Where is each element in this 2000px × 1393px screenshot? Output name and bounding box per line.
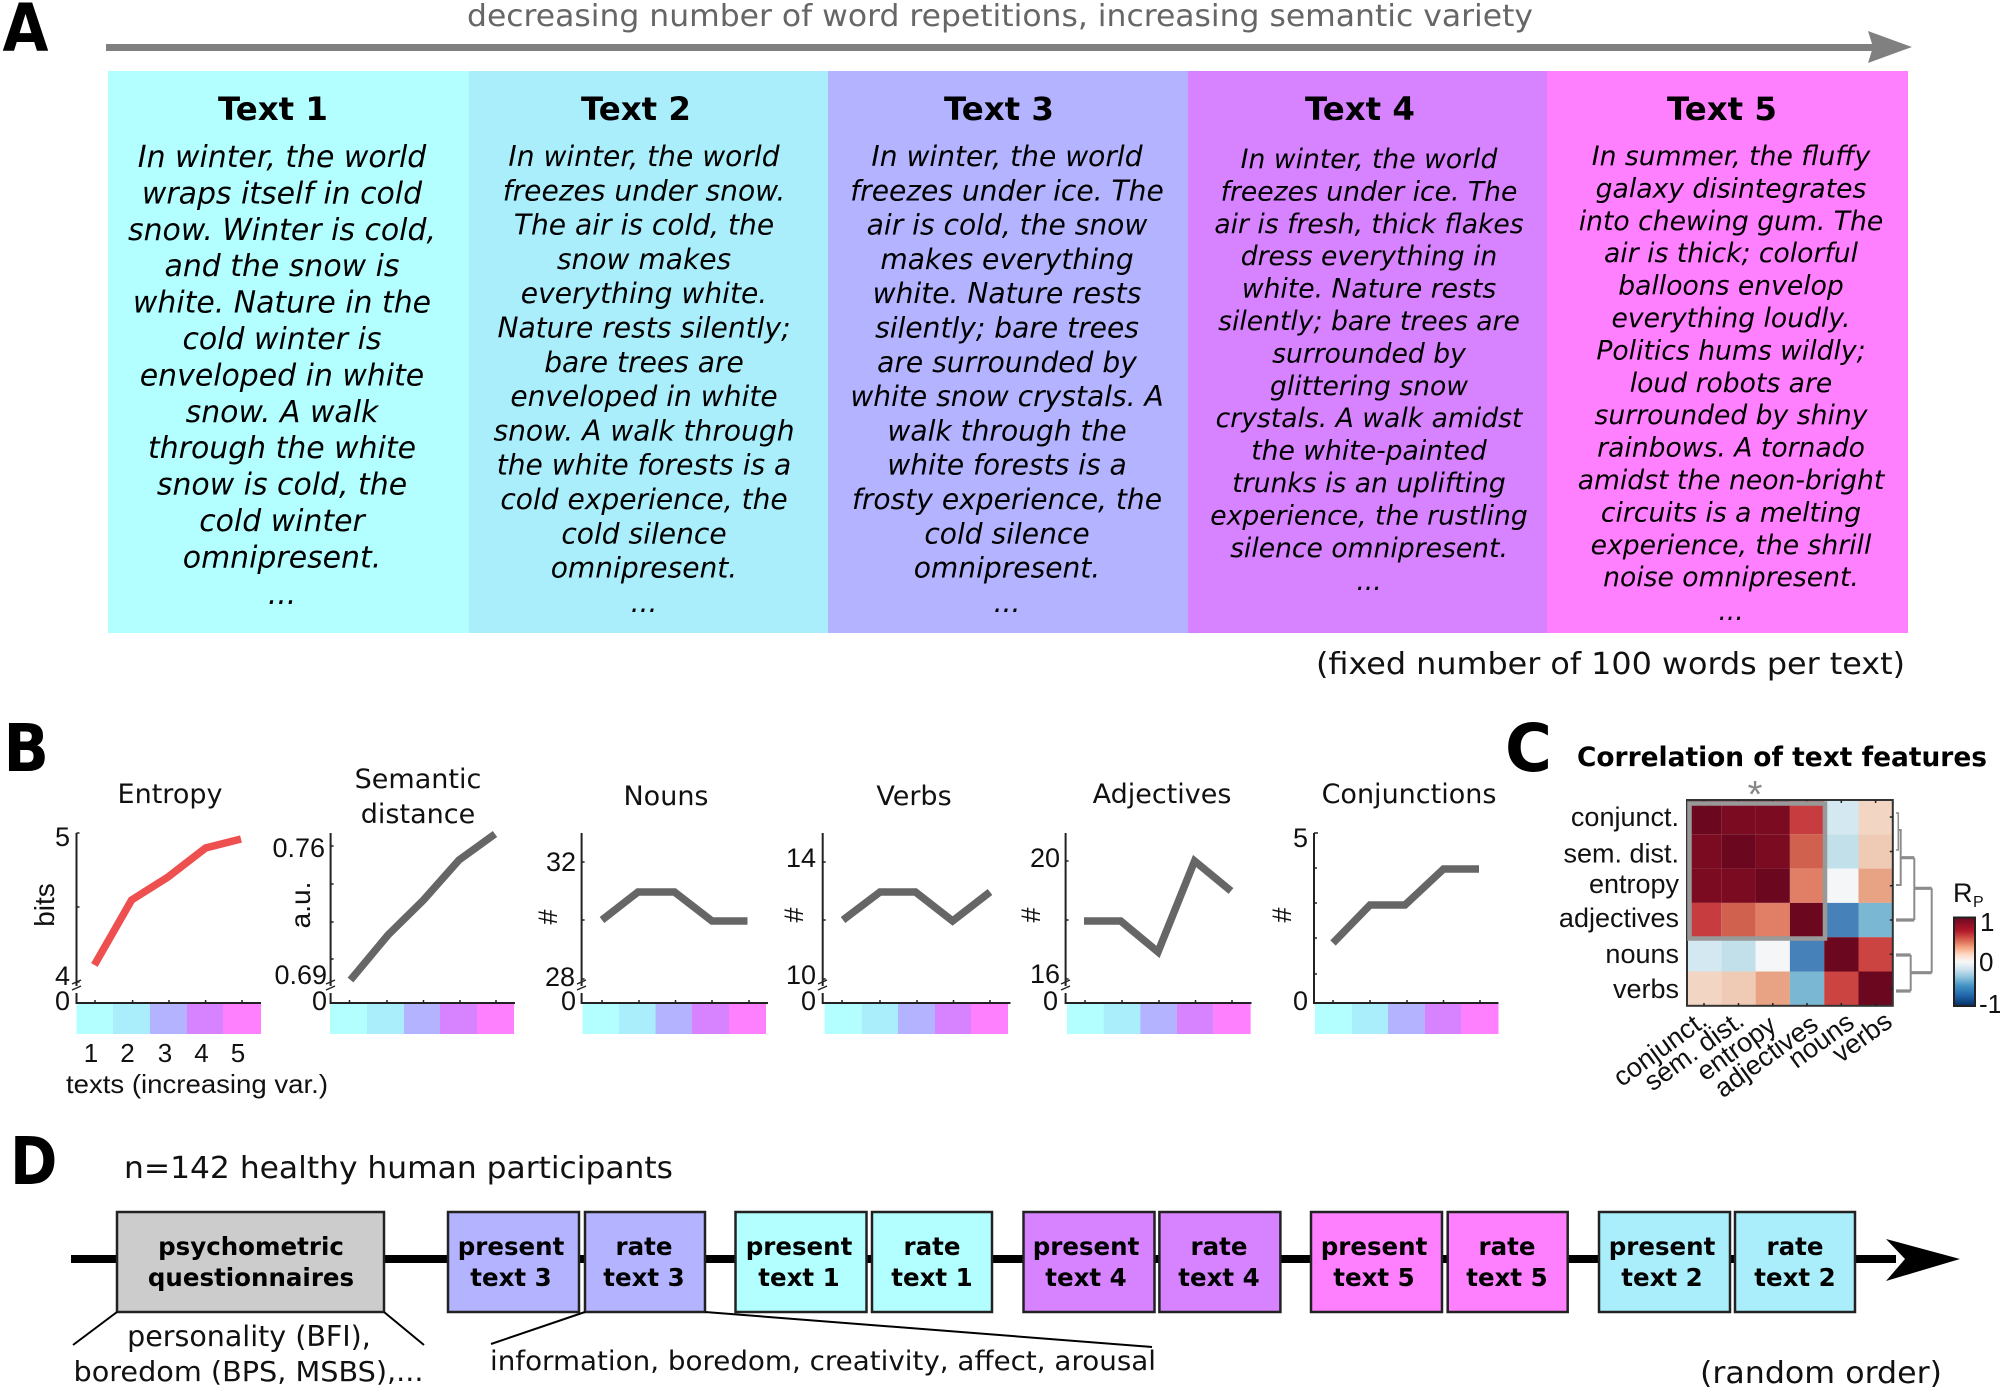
- panel: Text 1: cold winter is: [183, 322, 381, 357]
- panel: Text 3: In winter, the world: [871, 140, 1143, 173]
- chart: Entropy: 1: [84, 1038, 98, 1068]
- panel: Text 3: [828, 71, 1188, 633]
- panel: Text 5: Text 5: [1667, 90, 1777, 128]
- chart: Verbs: Verbs: [876, 781, 952, 812]
- legend: colorbar: 1: [1980, 907, 1994, 937]
- panel: Text 3: air is cold, the snow: [867, 209, 1147, 242]
- box: rate text 4: rate: [1191, 1232, 1247, 1261]
- legend: colorbar: P: [1973, 894, 1984, 911]
- panel: Text 4: Text 4: [1305, 90, 1415, 128]
- panel: Text 5: into chewing gum. The: [1579, 206, 1883, 237]
- chart: Nouns: 28: [545, 962, 575, 992]
- heading: participants: n=142 healthy human participants: [124, 1151, 673, 1186]
- legend: colorbar: [1953, 878, 2000, 1019]
- panel: Text 4: white. Nature rests: [1242, 274, 1496, 305]
- note: fixed word count: (fixed number of 100 words per text): [1316, 647, 1905, 682]
- y labels: heatmap rows: verbs: [1613, 974, 1679, 1004]
- chart: Nouns: 32: [546, 847, 576, 877]
- chart: Verbs: 14: [786, 843, 816, 873]
- panel: Text 1: omnipresent.: [183, 540, 381, 575]
- panel: Text 5: surrounded by shiny: [1595, 400, 1869, 431]
- box: present text 4: [1024, 1212, 1154, 1312]
- panel: Text 5: Politics hums wildly;: [1596, 335, 1866, 366]
- box: rate text 3: rate: [616, 1232, 672, 1261]
- panel: Text 1: In winter, the world: [138, 140, 427, 175]
- panel: Text 5: amidst the neon-bright: [1578, 465, 1886, 496]
- chart: Conjunctions: 5: [1293, 823, 1308, 853]
- box: rate text 4: text 4: [1178, 1263, 1260, 1292]
- x labels: heatmap columns: conjunct.: [1607, 1005, 1713, 1092]
- chart: Entropy: 3: [158, 1038, 172, 1068]
- chart: Semantic distance: 0.69: [274, 960, 327, 990]
- panel: Text 1: and the snow is: [165, 249, 399, 284]
- y labels: heatmap rows: entropy: [1589, 869, 1679, 899]
- chart: Verbs: 0: [801, 986, 816, 1016]
- legend: colorbar: R: [1953, 878, 1972, 908]
- panel: Text 1: white. Nature in the: [133, 286, 431, 321]
- box: psychometric questionnaires: questionnaires: [148, 1263, 354, 1292]
- box: rate text 1: rate: [904, 1232, 960, 1261]
- chart: Adjectives: 0: [1043, 986, 1058, 1016]
- panel: Text 1: through the white: [148, 431, 416, 466]
- y labels: heatmap rows: [1559, 802, 1679, 1004]
- panel: Text 5: ...: [1718, 596, 1744, 627]
- arrow: timeline: [71, 1239, 1960, 1281]
- panel: Text 3: frosty experience, the: [852, 483, 1162, 516]
- panel: Text 5: In summer, the fluffy: [1592, 141, 1872, 172]
- heatmap: feature correlation: [1687, 800, 1893, 1006]
- chart: Entropy: 2: [120, 1038, 135, 1068]
- panel: Text 4: silently; bare trees are: [1218, 306, 1520, 337]
- x labels: heatmap columns: nouns: [1782, 1007, 1860, 1074]
- panel: Text 1: enveloped in white: [140, 358, 424, 393]
- panel: Text 4: surrounded by: [1272, 338, 1467, 369]
- chart: Conjunctions: Conjunctions: [1322, 779, 1496, 810]
- y labels: heatmap rows: adjectives: [1559, 903, 1679, 933]
- chart: Adjectives: Adjectives: [1093, 779, 1231, 810]
- box: rate text 5: rate: [1479, 1232, 1535, 1261]
- box: rate text 3: [585, 1212, 705, 1312]
- panel: Text 2: ...: [631, 586, 657, 619]
- panel: Text 4: [1188, 71, 1547, 633]
- panel: Text 2: Text 2: [581, 90, 691, 128]
- panel: Text 3: walk through the: [887, 414, 1127, 447]
- y labels: heatmap rows: conjunct.: [1571, 802, 1679, 832]
- panel: Text 5: noise omnipresent.: [1603, 562, 1859, 593]
- chart: Entropy: [29, 779, 328, 1099]
- panel: Text 1: snow. A walk: [186, 395, 380, 430]
- box: present text 4: text 4: [1045, 1263, 1127, 1292]
- chart: Conjunctions: 0: [1293, 986, 1308, 1016]
- panel: Text 4: ...: [1356, 566, 1382, 597]
- panel: Text 4: In winter, the world: [1241, 144, 1497, 175]
- chart: Entropy: texts (increasing var.): [66, 1069, 328, 1099]
- y labels: heatmap rows: sem. dist.: [1563, 839, 1679, 869]
- chart: Verbs: 10: [786, 960, 816, 990]
- box: rate text 2: text 2: [1754, 1263, 1836, 1292]
- panel: Text 5: galaxy disintegrates: [1596, 173, 1866, 204]
- legend: colorbar: 0: [1979, 947, 1993, 977]
- panel: Text 5: loud robots are: [1630, 368, 1832, 399]
- chart: Nouns: #: [533, 909, 563, 925]
- panel: Text 1: Text 1: [218, 90, 328, 128]
- box: present text 2: text 2: [1621, 1263, 1703, 1292]
- chart: Semantic distance: 0.76: [272, 833, 325, 863]
- panel: Text 3: freezes under ice. The: [850, 174, 1164, 207]
- panel: Text 5: balloons envelop: [1618, 271, 1844, 302]
- callout: questionnaire details: [73, 1312, 424, 1388]
- chart: Entropy: Entropy: [118, 779, 222, 810]
- chart: Semantic distance: [272, 764, 515, 1034]
- chart: Semantic distance: Semantic: [355, 764, 481, 795]
- x labels: heatmap columns: verbs: [1826, 1006, 1898, 1069]
- box: rate text 2: [1735, 1212, 1855, 1312]
- panel: Text 2: everything white.: [521, 277, 767, 310]
- box: present text 5: present: [1321, 1232, 1428, 1261]
- panel: Text 2: [469, 71, 828, 633]
- panel: Text 2: omnipresent.: [551, 552, 737, 585]
- arrow: gray direction arrow: [106, 31, 1912, 63]
- panel: Text 3: makes everything: [880, 243, 1134, 276]
- panel: Text 1: [108, 71, 469, 633]
- chart: Nouns: Nouns: [623, 781, 709, 812]
- panel: Text 3: silently; bare trees: [875, 312, 1139, 344]
- x labels: heatmap columns: adjectives: [1709, 1009, 1824, 1103]
- panel: Text 5: everything loudly.: [1612, 303, 1850, 334]
- box: present text 2: present: [1609, 1232, 1716, 1261]
- chart: Entropy: 5: [231, 1038, 245, 1068]
- chart: Semantic distance: a.u.: [285, 882, 316, 928]
- box: present text 3: text 3: [470, 1263, 552, 1292]
- panel: Text 2: In winter, the world: [508, 140, 780, 173]
- panel letter C: C: [1505, 710, 1552, 787]
- box: present text 5: [1311, 1212, 1442, 1312]
- box: present text 1: [736, 1212, 866, 1312]
- panel: Text 5: air is thick; colorful: [1604, 238, 1859, 269]
- panel: Text 5: [1547, 71, 1908, 633]
- panel: Text 2: enveloped in white: [510, 380, 778, 413]
- panel: Text 4: glittering snow: [1270, 371, 1468, 402]
- panel: Text 2: The air is cold, the: [514, 209, 774, 242]
- panel: Text 1: cold winter: [199, 504, 367, 539]
- box: present text 4: present: [1033, 1232, 1140, 1261]
- chart: Adjectives: 20: [1030, 843, 1060, 873]
- panel: Text 2: cold experience, the: [500, 483, 788, 516]
- box: rate text 5: text 5: [1466, 1263, 1548, 1292]
- panel: Text 1: snow is cold, the: [157, 468, 407, 503]
- chart: Entropy: 4: [194, 1038, 209, 1068]
- panel: Text 4: silence omnipresent.: [1230, 533, 1508, 564]
- panel: Text 2: cold silence: [561, 517, 727, 550]
- panel letter D: D: [10, 1123, 57, 1200]
- box: present text 1: text 1: [758, 1263, 840, 1292]
- chart: Adjectives: 16: [1030, 959, 1060, 989]
- box: rate text 1: text 1: [891, 1263, 973, 1292]
- callout: questionnaire details: boredom (BPS, MSBS),...: [74, 1356, 424, 1388]
- callout: rating dimensions: information, boredom, creativity, affect, arousal: [490, 1346, 1156, 1377]
- callout: rating dimensions: [490, 1312, 1156, 1377]
- panel: Text 3: ...: [994, 586, 1020, 619]
- heading: correlation: Correlation of text features: [1577, 742, 1987, 773]
- panel: Text 2: snow. A walk through: [493, 414, 795, 447]
- panel: Text 3: Text 3: [944, 90, 1054, 128]
- chart: dendrogram: [1896, 813, 1932, 991]
- box: present text 2: [1599, 1212, 1730, 1312]
- panel: Text 3: white. Nature rests: [873, 277, 1142, 310]
- box: present text 3: [448, 1212, 579, 1312]
- panel: Text 5: experience, the shrill: [1591, 530, 1872, 561]
- box: rate text 3: text 3: [603, 1263, 685, 1292]
- heading: decreasing repetitions: decreasing number of word repetitions, increasing semantic variety: [467, 0, 1533, 34]
- box: rate text 5: [1448, 1212, 1568, 1312]
- panel: Text 1: snow. Winter is cold,: [128, 213, 436, 248]
- box: rate text 4: [1159, 1212, 1280, 1312]
- chart: Nouns: [533, 781, 768, 1034]
- box: present text 5: text 5: [1333, 1263, 1415, 1292]
- box: present text 3: present: [458, 1232, 565, 1261]
- chart: Verbs: #: [779, 907, 809, 923]
- x labels: heatmap columns: entropy: [1691, 1009, 1782, 1087]
- panel: Text 4: crystals. A walk amidst: [1216, 403, 1524, 434]
- panel: Text 2: the white forests is a: [497, 449, 791, 482]
- y labels: heatmap rows: nouns: [1605, 939, 1679, 969]
- panel: Text 3: omnipresent.: [914, 552, 1100, 585]
- panel: Text 2: Nature rests silently;: [497, 312, 791, 344]
- chart: Entropy: bits: [29, 883, 60, 927]
- box: psychometric questionnaires: psychometric: [158, 1232, 344, 1261]
- x labels: heatmap columns: [1607, 1005, 1898, 1103]
- chart: Adjectives: [1016, 779, 1252, 1034]
- callout: questionnaire details: personality (BFI),: [127, 1320, 371, 1353]
- chart: Entropy: 5: [55, 822, 70, 852]
- panel: Text 5: circuits is a melting: [1601, 497, 1861, 528]
- chart: Nouns: 0: [561, 986, 576, 1016]
- panel: Text 2: freezes under snow.: [503, 174, 785, 207]
- box: rate text 2: rate: [1767, 1232, 1823, 1261]
- chart: Conjunctions: [1267, 779, 1498, 1034]
- chart: Semantic distance: 0: [312, 986, 327, 1016]
- icon: significance star: *: [1748, 774, 1763, 816]
- panel: Text 2: bare trees are: [544, 346, 744, 379]
- panel: Text 3: white snow crystals. A: [850, 380, 1164, 413]
- panel: Text 2: snow makes: [557, 243, 732, 276]
- panel: Text 4: air is fresh, thick flakes: [1214, 209, 1524, 240]
- panel: Text 1: wraps itself in cold: [142, 176, 423, 211]
- panel: Text 4: dress everything in: [1241, 241, 1497, 272]
- panel: Text 4: experience, the rustling: [1210, 500, 1528, 531]
- chart: Entropy: 0: [55, 986, 70, 1016]
- chart: Conjunctions: #: [1267, 907, 1297, 923]
- x labels: heatmap columns: sem. dist.: [1638, 1005, 1750, 1097]
- panel: Text 4: trunks is an uplifting: [1232, 468, 1506, 499]
- chart: Semantic distance: distance: [361, 799, 475, 830]
- chart: Entropy: 4: [55, 961, 70, 991]
- panel: Text 3: are surrounded by: [877, 346, 1137, 379]
- panel: Text 1: ...: [268, 577, 296, 612]
- box: psychometric questionnaires: [117, 1212, 384, 1312]
- box: rate text 1: [872, 1212, 992, 1312]
- note: random order: (random order): [1700, 1356, 1942, 1391]
- panel: Text 3: white forests is a: [887, 449, 1127, 482]
- chart: Adjectives: #: [1016, 907, 1046, 923]
- panel: Text 4: freezes under ice. The: [1221, 176, 1517, 207]
- chart: Verbs: [779, 781, 1010, 1034]
- panel: Text 4: the white-painted: [1251, 436, 1487, 467]
- box: present text 1: present: [746, 1232, 853, 1261]
- panel: Text 5: rainbows. A tornado: [1597, 433, 1865, 464]
- panel: Text 3: cold silence: [924, 517, 1090, 550]
- panel letter B: B: [4, 710, 49, 787]
